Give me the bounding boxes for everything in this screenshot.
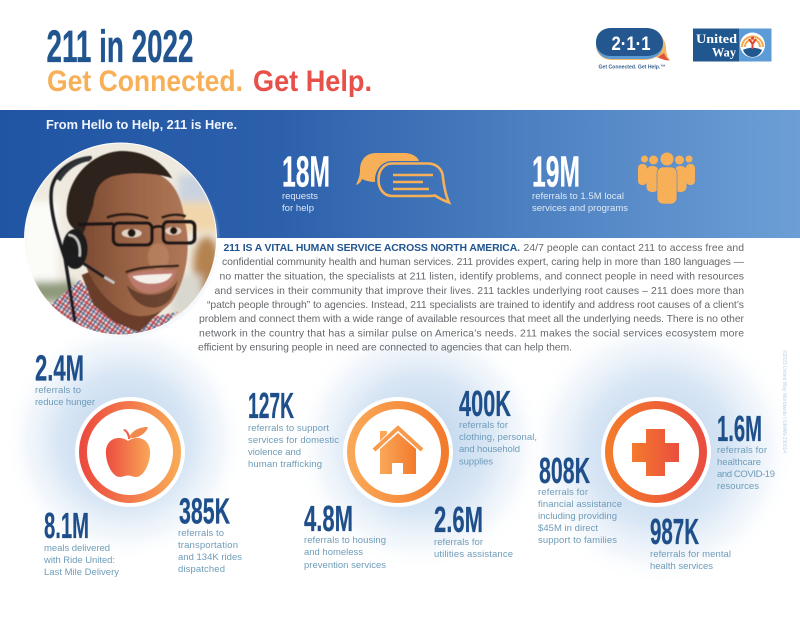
stat: 2.4M hunger: referrals to <box>35 385 81 396</box>
stat: 18M requests <box>282 148 330 214</box>
stat: 8.1M meals: meals delivered <box>44 543 110 554</box>
stat: 1.6M healthcare: and COVID-19 <box>717 469 775 480</box>
stat: 808K financial assistance: $45M in direct <box>538 523 598 534</box>
logo: 211: 2·1·1 <box>612 34 651 55</box>
stat: 127K domestic violence: 127K <box>248 385 294 426</box>
stat: 1.6M healthcare: resources <box>717 481 759 492</box>
icon: apple in ring <box>75 397 185 507</box>
stat: 4.8M housing <box>304 498 386 571</box>
stat: 808K financial assistance: support to families <box>538 535 617 546</box>
icon: chat bubbles <box>356 153 449 202</box>
icon: house in ring <box>343 397 453 507</box>
stat: 8.1M meals: Last Mile Delivery <box>44 567 119 578</box>
stat: 808K financial assistance: 808K <box>539 450 590 491</box>
text block: about 211: “patch people through” to agencies. Instead, 211 specialists are trained to identify and address root causes of a client’s <box>207 300 744 311</box>
stat: 385K transportation: 385K <box>179 490 230 532</box>
stat: 987K mental health: health services <box>650 561 713 572</box>
text block: about 211: no matter the situation, the specialists at 211 listen, identify problems, and connect people in need with resources <box>220 272 744 282</box>
stat: 400K clothing <box>459 383 537 468</box>
stat: 385K transportation: referrals to <box>178 528 224 539</box>
logo: United Way: United <box>696 31 738 46</box>
stat: 2.4M hunger <box>35 348 95 408</box>
stat: 8.1M meals: with Ride United: <box>43 555 115 566</box>
stat: 4.8M housing: and homeless <box>304 547 363 558</box>
stat: 1.6M healthcare: referrals for <box>717 445 767 456</box>
icon: people group <box>638 152 695 204</box>
subtitle: Get Connected. <box>47 65 243 98</box>
stat: 4.8M housing: referrals to housing <box>304 535 386 546</box>
stat: 2.6M utilities: 2.6M <box>434 499 483 540</box>
glow backgrounds <box>3 314 796 586</box>
text block: about 211: 211 IS A VITAL HUMAN SERVICE ACROSS NORTH AMERICA. <box>224 243 520 254</box>
stat: 808K financial assistance: including providing <box>538 511 617 522</box>
stat: 127K domestic violence: referrals to support <box>248 423 329 434</box>
stat: 400K clothing: referrals for <box>459 420 508 431</box>
text block: about 211: and services in their community that improve their lives. 211 tackles underlying root causes – 211 does more than <box>214 286 744 297</box>
logo: 211: Get Connected. Get Help.™ <box>598 64 666 70</box>
band heading: From Hello to Help, 211 is Here. <box>46 118 237 132</box>
logo: United Way <box>693 28 772 62</box>
title: 211 in 2022 <box>46 21 194 72</box>
stat: 2.6M utilities <box>434 499 513 560</box>
stat: 1.6M healthcare <box>717 408 775 492</box>
stat: 385K transportation: transportation <box>178 540 238 551</box>
stat: 400K clothing: clothing, personal, <box>459 432 537 443</box>
stat: 400K clothing: 400K <box>459 383 511 424</box>
stat: 2.6M utilities: utilities assistance <box>434 549 513 560</box>
text block: about 211 <box>198 243 745 354</box>
logo: 211 <box>596 28 670 70</box>
stat: 808K financial assistance: financial assistance <box>538 499 622 510</box>
stat: 808K financial assistance <box>538 450 622 546</box>
photo: smiling call-centre specialist with headset <box>24 142 220 336</box>
copyright note: ©2023 United Way Worldwide | GMAN-230014 <box>781 350 788 453</box>
stat: 385K transportation <box>178 490 242 575</box>
stat: 400K clothing: supplies <box>459 456 493 468</box>
stat: 127K domestic violence: human trafficking <box>248 459 322 470</box>
text block: about 211: problem and connect them with a wide range of available resources that meet all the underlying needs. There is no other <box>199 314 745 325</box>
stat: 400K clothing: and household <box>459 444 520 455</box>
stat: 127K domestic violence <box>248 385 339 470</box>
stat: 8.1M meals: 8.1M <box>44 505 89 546</box>
stat: 19M referrals <box>532 148 628 214</box>
text block: about 211: confidential community health and human services. 211 provides expert, caring help in more than 180 languages — <box>222 257 745 268</box>
subtitle <box>47 65 372 98</box>
stat: 18M requests: 18M <box>282 148 330 196</box>
text block: about 211: efficient by ensuring people in need are connected to agencies that can help them. <box>198 342 572 354</box>
stat: 127K domestic violence: services for domestic <box>248 435 339 446</box>
stat: 18M requests: requests <box>282 191 318 202</box>
stat: 385K transportation: and 134K rides <box>178 552 242 563</box>
stat: 987K mental health <box>650 511 731 572</box>
stat: 18M requests: for help <box>282 203 314 214</box>
stat: 1.6M healthcare: healthcare <box>717 457 761 468</box>
stat: 19M referrals: referrals to 1.5M local <box>532 191 624 202</box>
stat: 2.6M utilities: referrals for <box>434 537 483 548</box>
stat: 2.4M hunger: reduce hunger <box>35 397 95 408</box>
stat: 8.1M meals <box>43 505 119 578</box>
band: blue header <box>0 110 800 238</box>
stat: 4.8M housing: prevention services <box>304 560 386 571</box>
stat: 385K transportation: dispatched <box>178 564 225 575</box>
subtitle: Get Help. <box>253 65 372 98</box>
stat: 19M referrals: services and programs <box>532 203 628 214</box>
stat: 127K domestic violence: violence and <box>248 447 301 458</box>
stat: 808K financial assistance: referrals for <box>538 487 588 498</box>
stat: 1.6M healthcare: 1.6M <box>717 408 762 449</box>
text block: about 211: network in the country that has a similar pulse on America’s needs. 211 makes the social services ecosystem more <box>199 328 744 340</box>
logo: United Way: Way <box>712 44 736 60</box>
text block: about 211: 24/7 people can contact 211 to access free and <box>524 243 744 254</box>
stat: 2.4M hunger: 2.4M <box>35 348 84 388</box>
stat: 987K mental health: 987K <box>650 511 699 552</box>
stat: 987K mental health: referrals for mental <box>650 549 731 560</box>
icon: medical cross in ring <box>601 397 711 507</box>
stat: 19M referrals: 19M <box>532 148 580 196</box>
stat: 4.8M housing: 4.8M <box>304 498 353 539</box>
